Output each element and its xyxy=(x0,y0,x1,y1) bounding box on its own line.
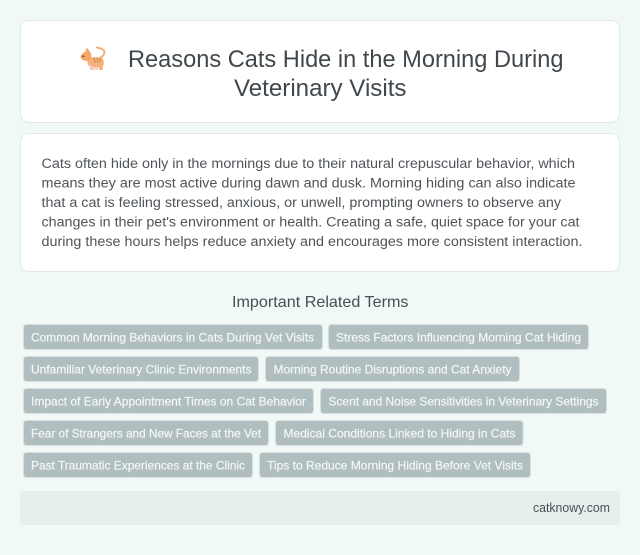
tag xyxy=(24,452,252,478)
tag: Morning Routine Disruptions and Cat Anxiety xyxy=(274,363,512,377)
panel: description xyxy=(20,134,620,272)
tag: Impact of Early Appointment Times on Cat Behavior xyxy=(31,395,306,409)
panel: header xyxy=(20,20,620,122)
tag xyxy=(24,388,314,414)
tag xyxy=(276,420,523,446)
tag xyxy=(24,420,268,446)
tag: Past Traumatic Experiences at the Clinic xyxy=(31,459,245,473)
tag: Scent and Noise Sensitivities in Veterinary Settings xyxy=(328,395,598,409)
title xyxy=(128,46,564,102)
title: Veterinary Visits xyxy=(234,75,406,102)
icon: cat xyxy=(80,48,104,70)
tag xyxy=(266,356,520,382)
tag: Common Morning Behaviors in Cats During Vet Visits xyxy=(31,331,314,345)
tag: Tips to Reduce Morning Hiding Before Vet Visits xyxy=(267,459,523,473)
text block: description: changes in their pet's environment or health. Creating a safe, quiet space for your cat xyxy=(42,214,580,230)
tag: Stress Factors Influencing Morning Cat Hiding xyxy=(336,331,581,345)
text block: description: during these hours helps reduce anxiety and encourages more consistent interaction. xyxy=(42,234,582,250)
text block: description: Cats often hide only in the mornings due to their natural crepuscular behavior, which xyxy=(42,156,575,172)
tag: Fear of Strangers and New Faces at the Vet xyxy=(31,427,262,441)
footer xyxy=(20,491,620,525)
title: Reasons Cats Hide in the Morning During xyxy=(128,46,564,73)
text block: description: means they are most active during dawn and dusk. Morning hiding can also indicate xyxy=(42,176,576,192)
tag xyxy=(260,452,530,478)
tag xyxy=(328,324,588,350)
text block: description xyxy=(42,156,582,250)
footer source text: catknowy.com xyxy=(533,501,610,515)
tag xyxy=(24,324,322,350)
tag: Medical Conditions Linked to Hiding in Cats xyxy=(284,427,516,441)
text block: description: that a cat is feeling stressed, anxious, or unwell, prompting owners to observe any xyxy=(42,195,562,211)
panel: related term tags xyxy=(24,324,606,478)
heading: important related terms: Important Related Terms xyxy=(232,294,409,311)
tag xyxy=(24,356,258,382)
tag xyxy=(320,388,606,414)
tag: Unfamiliar Veterinary Clinic Environments xyxy=(31,363,252,377)
